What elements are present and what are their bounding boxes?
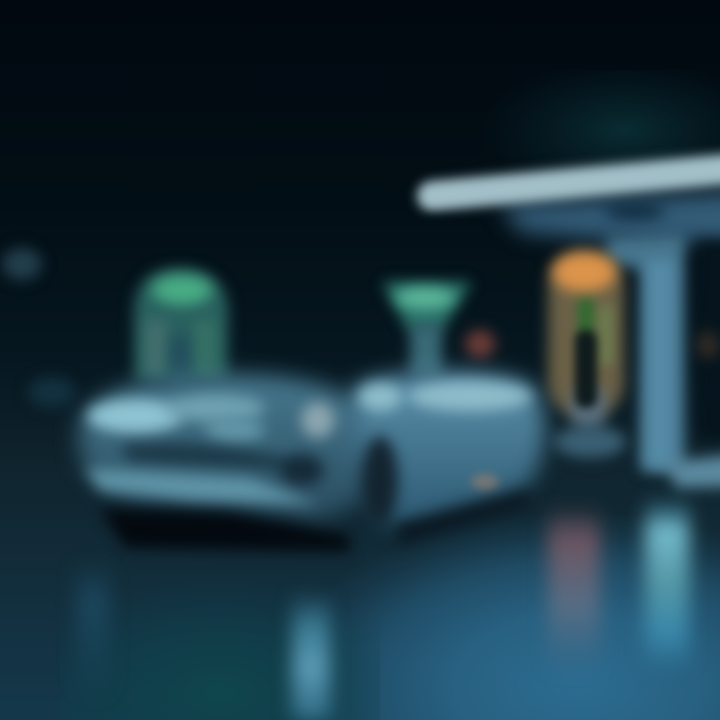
scene objects xyxy=(2,166,720,552)
canopy xyxy=(432,166,720,245)
orange charger xyxy=(548,252,624,430)
right car xyxy=(350,371,545,545)
reflection: center light xyxy=(292,590,330,720)
charger left: green-topped arch xyxy=(134,268,228,380)
station pillar and frame xyxy=(606,235,720,488)
left distant light xyxy=(2,248,42,280)
reflection: orange charger xyxy=(548,505,600,675)
reflection: charger glow right xyxy=(645,495,689,670)
left car xyxy=(78,374,365,552)
reflection: left xyxy=(76,560,110,700)
wet floor xyxy=(60,480,720,720)
charger middle: green funnel xyxy=(382,282,472,375)
orange spot xyxy=(465,330,495,358)
haze left of car xyxy=(28,377,76,407)
charger base near right car xyxy=(554,426,626,458)
background glow behind canopy xyxy=(480,70,720,190)
